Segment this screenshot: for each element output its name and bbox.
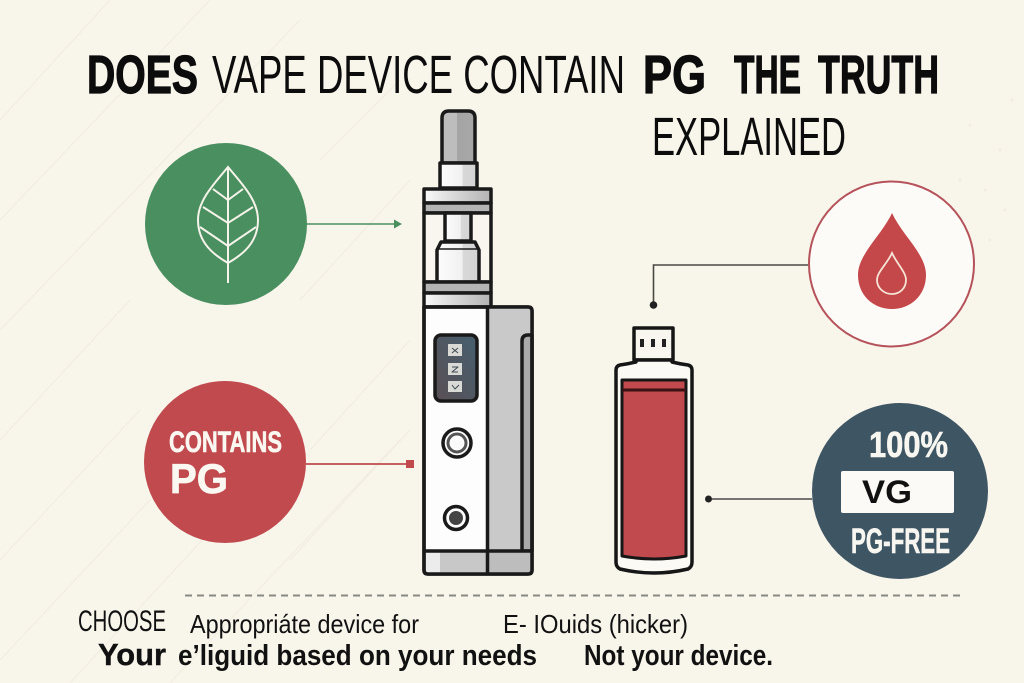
title: DOES xyxy=(87,45,198,105)
fire button xyxy=(443,429,471,457)
bottle cap xyxy=(634,328,673,360)
tank top band xyxy=(424,189,491,213)
connector: VG drop to bottle xyxy=(650,265,808,309)
arrow: leaf to device xyxy=(307,220,402,228)
mod body xyxy=(424,307,532,574)
callout: 100% VG PG-free badge: PG-FREE xyxy=(851,522,950,561)
VG label: VG xyxy=(862,474,912,510)
title: EXPLAINED xyxy=(652,107,846,167)
red liquid xyxy=(622,380,686,559)
mouthpiece xyxy=(442,111,475,163)
bottle body xyxy=(616,360,692,573)
callout: contains PG badge: CONTAINS xyxy=(169,426,282,459)
footer text: E- IOuids (hicker) xyxy=(503,609,688,639)
footer text: e’liguid based on your needs xyxy=(178,640,537,672)
callout: VG drop badge xyxy=(809,182,974,346)
display screen xyxy=(435,335,477,401)
footer text: Not your device. xyxy=(584,640,773,672)
callout: 100% VG PG-free badge: 100% xyxy=(869,424,948,465)
VG label xyxy=(841,471,954,513)
divider xyxy=(185,594,962,596)
footer text: Appropriáte device for xyxy=(190,609,419,639)
footer text: CHOOSE xyxy=(78,605,166,638)
adjust button xyxy=(444,506,468,530)
callout: plant-based leaf badge xyxy=(145,143,402,305)
title: TRUTH xyxy=(818,45,939,105)
title: PG xyxy=(643,45,706,105)
callout: 100% VG PG-free badge xyxy=(812,403,988,579)
illustration: e-liquid bottle xyxy=(616,328,692,573)
footer text xyxy=(78,605,773,672)
connector: VG badge to bottle xyxy=(705,496,812,502)
footer text: Your xyxy=(98,637,166,672)
callout: contains PG badge: PG xyxy=(170,455,228,502)
title: THE xyxy=(734,45,801,105)
icon: drop xyxy=(858,213,926,309)
title: VAPE DEVICE CONTAIN xyxy=(212,45,625,105)
title xyxy=(87,45,939,167)
connector: PG to device xyxy=(306,460,414,468)
tank glass cage xyxy=(424,213,491,282)
collar xyxy=(440,163,477,188)
tank lower band xyxy=(424,282,491,307)
icon: leaf xyxy=(198,167,258,283)
callout: contains PG badge xyxy=(144,381,414,543)
illustration: vape device xyxy=(424,111,532,574)
